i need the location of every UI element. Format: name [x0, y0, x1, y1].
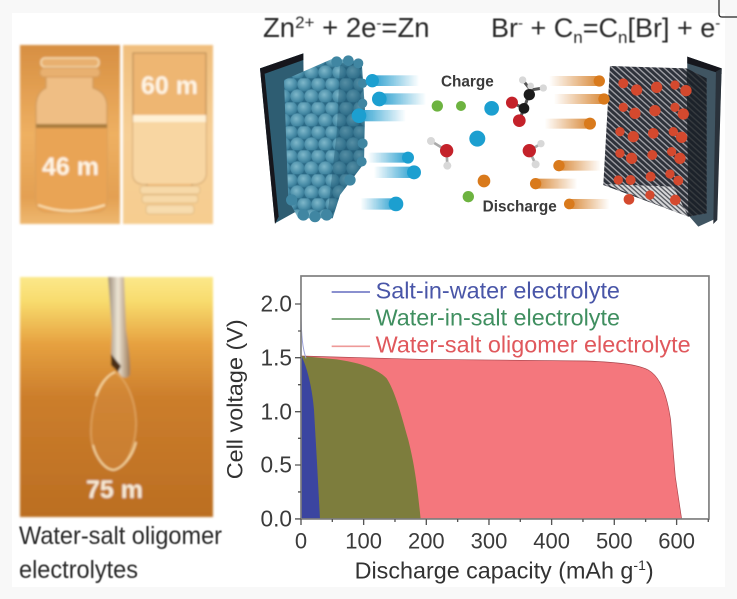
axis ticks — [295, 304, 708, 525]
y axis title: Cell voltage (V) — [223, 319, 248, 479]
red curve area: water-salt oligomer — [301, 356, 682, 519]
orange ion trails — [536, 76, 609, 209]
label: charge: Charge — [441, 74, 494, 91]
equation: bromide half reaction: n — [573, 28, 583, 47]
caption: water-salt oligomer electrolytes: electrolytes — [19, 556, 138, 584]
photo: 46 m vial — [20, 45, 120, 224]
photo: 60 m inverted vial — [123, 45, 213, 224]
orange bromide ions — [478, 75, 610, 209]
label: 75 m: 75 m — [86, 476, 143, 504]
equation: bromide half reaction: n — [618, 28, 628, 47]
x axis tick labels: 100 — [345, 529, 382, 554]
y axis tick labels: 2.0 — [260, 291, 292, 317]
corner icon — [719, 0, 737, 17]
zinc electrode plate — [260, 53, 305, 224]
plot frame — [301, 276, 709, 519]
legend: Water-salt oligomer electrolyte — [376, 331, 691, 357]
equation: zinc half reaction: + 2e — [314, 12, 376, 43]
water molecule right — [523, 140, 545, 168]
acetate molecule — [506, 76, 547, 127]
caption: water-salt oligomer electrolytes: Water-salt oligomer — [19, 522, 222, 550]
y axis tick labels: 1.5 — [260, 344, 292, 370]
blue curve initial spike — [301, 313, 306, 358]
y axis tick labels: 1.0 — [260, 398, 292, 424]
caption: water-salt oligomer electrolytes — [19, 522, 222, 584]
x axis tick labels: 400 — [533, 529, 570, 554]
equation: bromide half reaction: [Br] + e — [628, 13, 715, 43]
equation: bromide half reaction: + C — [523, 13, 573, 43]
blue zinc ions — [352, 74, 499, 211]
zinc lattice — [284, 55, 368, 222]
photo: 75 m gel film — [20, 277, 213, 517]
equation: zinc half reaction: Zn — [263, 12, 295, 43]
blue ion trails — [359, 75, 426, 210]
carbon layered lattice — [603, 66, 707, 217]
blue curve area: salt-in-water — [301, 355, 320, 519]
discharge capacity chart — [223, 276, 709, 584]
y axis tick labels: 0.0 — [260, 506, 292, 532]
label: 46 m: 46 m — [42, 153, 99, 181]
equation: zinc half reaction: - — [376, 15, 381, 32]
x axis tick labels: 200 — [408, 529, 445, 554]
battery schematic — [260, 53, 722, 227]
y axis tick labels: 0.5 — [260, 452, 292, 478]
label: discharge: Discharge — [483, 198, 557, 215]
x axis tick labels: 600 — [658, 529, 695, 554]
legend: Water-in-salt electrolyte — [376, 304, 620, 330]
equation: bromide half reaction: - — [518, 15, 523, 32]
legend: Salt-in-water electrolyte — [376, 278, 620, 304]
green ions — [432, 100, 474, 202]
equation: zinc half reaction: =Zn — [381, 12, 430, 43]
legend — [332, 278, 691, 357]
x axis tick labels — [295, 529, 695, 554]
label: 60 m: 60 m — [141, 72, 198, 100]
x axis title: -1 — [633, 557, 646, 573]
equation: bromide half reaction: Br — [491, 13, 518, 43]
y axis tick labels — [260, 291, 292, 532]
x axis tick labels: 0 — [295, 529, 307, 554]
water molecule left — [427, 137, 453, 170]
cathode plate — [687, 57, 722, 227]
equation: bromide half reaction: =C — [583, 13, 618, 43]
equation: zinc half reaction: 2+ — [295, 13, 315, 32]
x axis tick labels: 300 — [471, 529, 507, 554]
x axis title: Discharge capacity (mAh g — [355, 558, 633, 584]
bromine atoms in lattice — [614, 78, 692, 205]
olive curve area: water-in-salt — [301, 356, 421, 519]
x axis tick labels: 500 — [596, 529, 633, 554]
x axis title: ) — [646, 558, 654, 584]
equation: bromide half reaction: - — [715, 15, 720, 32]
